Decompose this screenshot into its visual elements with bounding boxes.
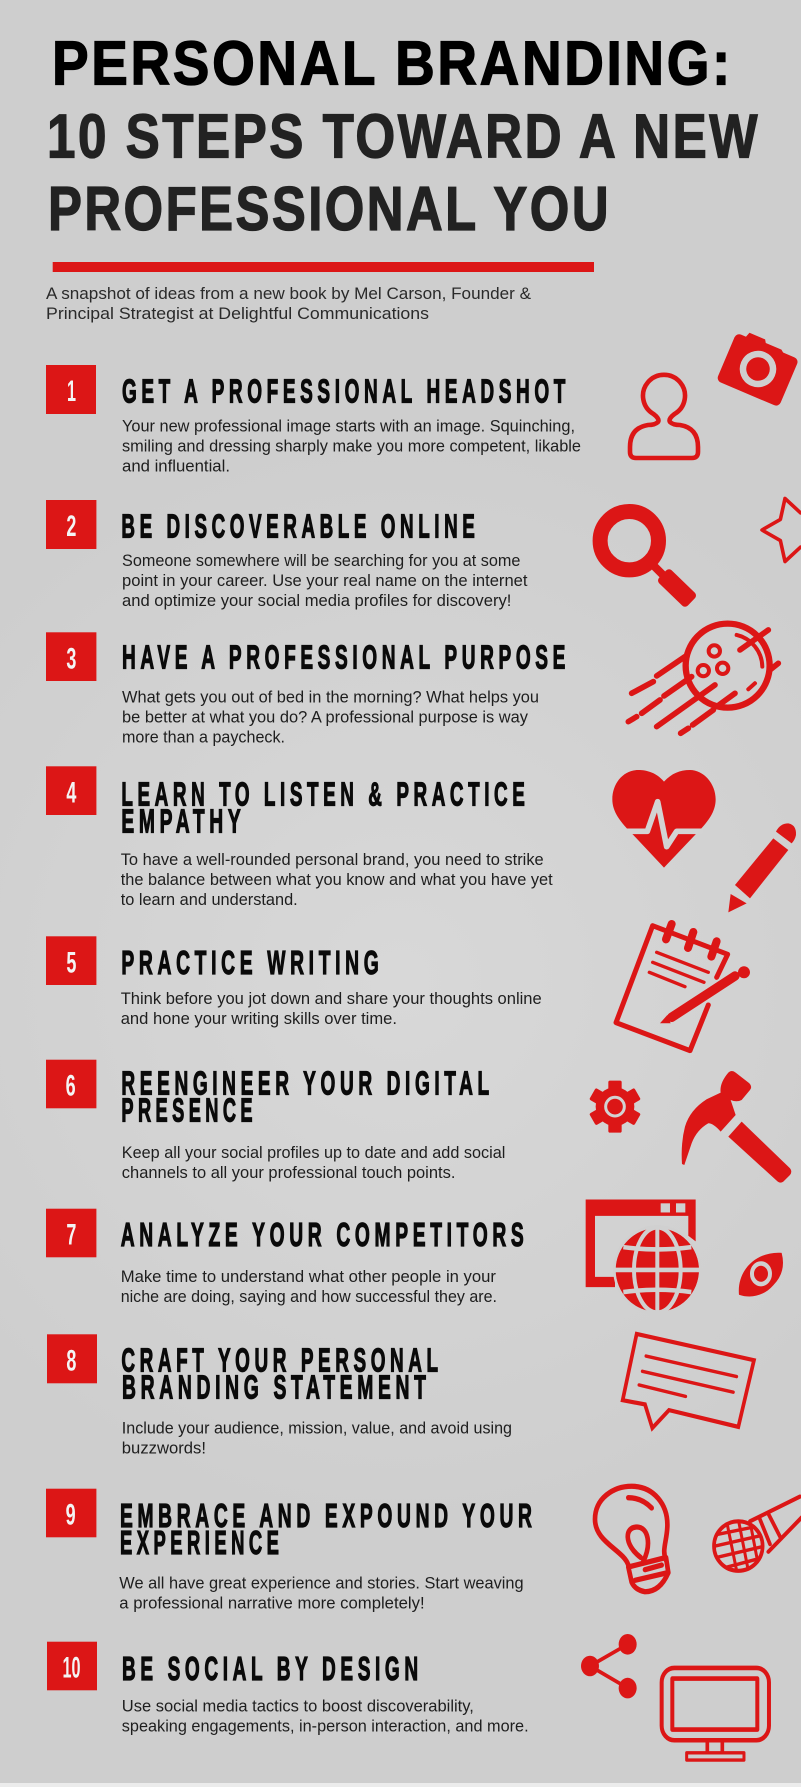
body text 1: and influential. xyxy=(122,457,230,476)
body text 6: Keep all your social profiles up to date and add social xyxy=(122,1143,505,1162)
panel: step 4 xyxy=(46,766,553,909)
icon: gear xyxy=(589,1081,641,1133)
body text 1: smiling and dressing sharply make you more competent, likable xyxy=(122,437,581,456)
heading 8: CRAFT YOUR PERSONAL xyxy=(121,1342,443,1379)
title: PROFESSIONAL YOU xyxy=(48,175,611,244)
body text 2: Someone somewhere will be searching for you at some xyxy=(122,551,520,570)
number badge 2: 2 xyxy=(66,510,76,543)
number badge 5: 5 xyxy=(66,946,76,979)
icon: person outline xyxy=(630,375,698,458)
number badge 10: 10 xyxy=(62,1652,80,1685)
body text 7 xyxy=(121,1267,497,1306)
body text 2: point in your career. Use your real name on the internet xyxy=(122,571,528,590)
heading 6: REENGINEER YOUR DIGITAL xyxy=(121,1065,494,1102)
body text 6: channels to all your professional touch points. xyxy=(122,1163,455,1182)
body text 3: be better at what you do? A professional purpose is way xyxy=(122,708,528,727)
number badge 2 xyxy=(46,500,96,549)
icon: heart with pulse xyxy=(612,770,716,868)
body text 4: To have a well-rounded personal brand, you need to strike xyxy=(121,850,544,869)
icon: camera xyxy=(716,328,801,407)
body text 9 xyxy=(119,1573,524,1612)
icon: microphone xyxy=(714,1497,801,1571)
heading 6 xyxy=(121,1065,494,1129)
number badge 6: 6 xyxy=(66,1070,76,1103)
body text 1: Your new professional image starts with an image. Squinching, xyxy=(122,417,575,436)
title: PERSONAL BRANDING: xyxy=(52,29,733,98)
heading 2: BE DISCOVERABLE ONLINE xyxy=(121,508,479,545)
icon: hammer xyxy=(682,1071,791,1183)
body text 3 xyxy=(122,688,539,747)
icon: light bulb xyxy=(595,1486,668,1592)
number badge 1 xyxy=(46,365,96,414)
red title underline xyxy=(53,262,594,272)
body text 7: Make time to understand what other people in your xyxy=(121,1267,496,1286)
body text 6 xyxy=(122,1143,505,1182)
number badge 7: 7 xyxy=(66,1219,76,1252)
body text 2: and optimize your social media profiles for discovery! xyxy=(122,591,511,610)
body text 5: Think before you jot down and share your thoughts online xyxy=(121,989,542,1008)
body text 4: to learn and understand. xyxy=(121,890,298,909)
body text 8 xyxy=(122,1418,512,1457)
number badge 7 xyxy=(46,1209,96,1257)
body text 9: We all have great experience and stories. Start weaving xyxy=(119,1573,524,1592)
panel: step 7 xyxy=(46,1209,528,1306)
heading 10: BE SOCIAL BY DESIGN xyxy=(122,1650,423,1687)
heading 6: PRESENCE xyxy=(121,1092,257,1129)
heading 9: EXPERIENCE xyxy=(120,1524,283,1561)
body text 3: What gets you out of bed in the morning? What helps you xyxy=(122,688,539,707)
number badge 1: 1 xyxy=(67,375,76,408)
heading 9 xyxy=(120,1497,537,1561)
number badge 4 xyxy=(46,766,96,815)
body text 10: speaking engagements, in-person interaction, and more. xyxy=(122,1716,529,1735)
body text 9: a professional narrative more completely! xyxy=(119,1593,425,1612)
icon: notepad with pencil xyxy=(616,924,750,1051)
number badge 8: 8 xyxy=(66,1344,76,1377)
icon: eye xyxy=(739,1253,783,1297)
icon: magnifying glass xyxy=(600,512,698,608)
body text 4: the balance between what you know and what you have yet xyxy=(121,870,553,889)
body text 4 xyxy=(121,850,553,909)
number badge 5 xyxy=(46,936,96,985)
number badge 9: 9 xyxy=(66,1499,76,1532)
number badge 3 xyxy=(46,632,96,681)
panel: step 2 xyxy=(46,500,528,610)
body text 8: buzzwords! xyxy=(122,1438,206,1457)
icon: monitor xyxy=(662,1668,769,1760)
panel: step 5 xyxy=(46,936,542,1028)
body text 3: more than a paycheck. xyxy=(122,728,285,747)
number badge 4: 4 xyxy=(66,776,77,809)
heading 8: BRANDING STATEMENT xyxy=(122,1369,431,1406)
title xyxy=(47,29,760,244)
heading 4: EMPATHY xyxy=(121,803,245,840)
number badge 10 xyxy=(47,1642,97,1690)
number badge 6 xyxy=(46,1060,96,1108)
panel: step 10 xyxy=(47,1642,529,1735)
heading 5: PRACTICE WRITING xyxy=(121,944,383,981)
panel: step 3 xyxy=(46,632,570,747)
icon: comet ball xyxy=(628,624,778,733)
panel: step 6 xyxy=(46,1060,505,1182)
heading 7: ANALYZE YOUR COMPETITORS xyxy=(121,1216,528,1253)
subtitle: Principal Strategist at Delightful Communications xyxy=(46,304,429,323)
heading 8 xyxy=(121,1342,443,1406)
subtitle xyxy=(46,284,532,323)
subtitle: A snapshot of ideas from a new book by Mel Carson, Founder & xyxy=(46,284,532,303)
panel: step 9 xyxy=(46,1489,537,1612)
body text 8: Include your audience, mission, value, and avoid using xyxy=(122,1418,512,1437)
body text 10 xyxy=(122,1696,529,1735)
icon: browser window with globe xyxy=(586,1200,700,1314)
panel: step 1 xyxy=(46,365,581,476)
icon: speech bubble xyxy=(623,1334,754,1428)
body text 7: niche are doing, saying and how successful they are. xyxy=(121,1287,497,1306)
number badge 8 xyxy=(47,1334,97,1383)
icon: share nodes xyxy=(581,1634,637,1698)
icon: pencil xyxy=(728,823,796,912)
body text 5 xyxy=(121,989,542,1028)
body text 5: and hone your writing skills over time. xyxy=(121,1009,397,1028)
number badge 3: 3 xyxy=(66,642,76,675)
number badge 9 xyxy=(46,1489,96,1537)
icon: star outline xyxy=(762,498,801,562)
body text 2 xyxy=(122,551,528,610)
panel: step 8 xyxy=(47,1334,512,1457)
body text 10: Use social media tactics to boost discoverability, xyxy=(122,1696,474,1715)
body text 1 xyxy=(122,417,581,476)
heading 4 xyxy=(121,776,529,840)
